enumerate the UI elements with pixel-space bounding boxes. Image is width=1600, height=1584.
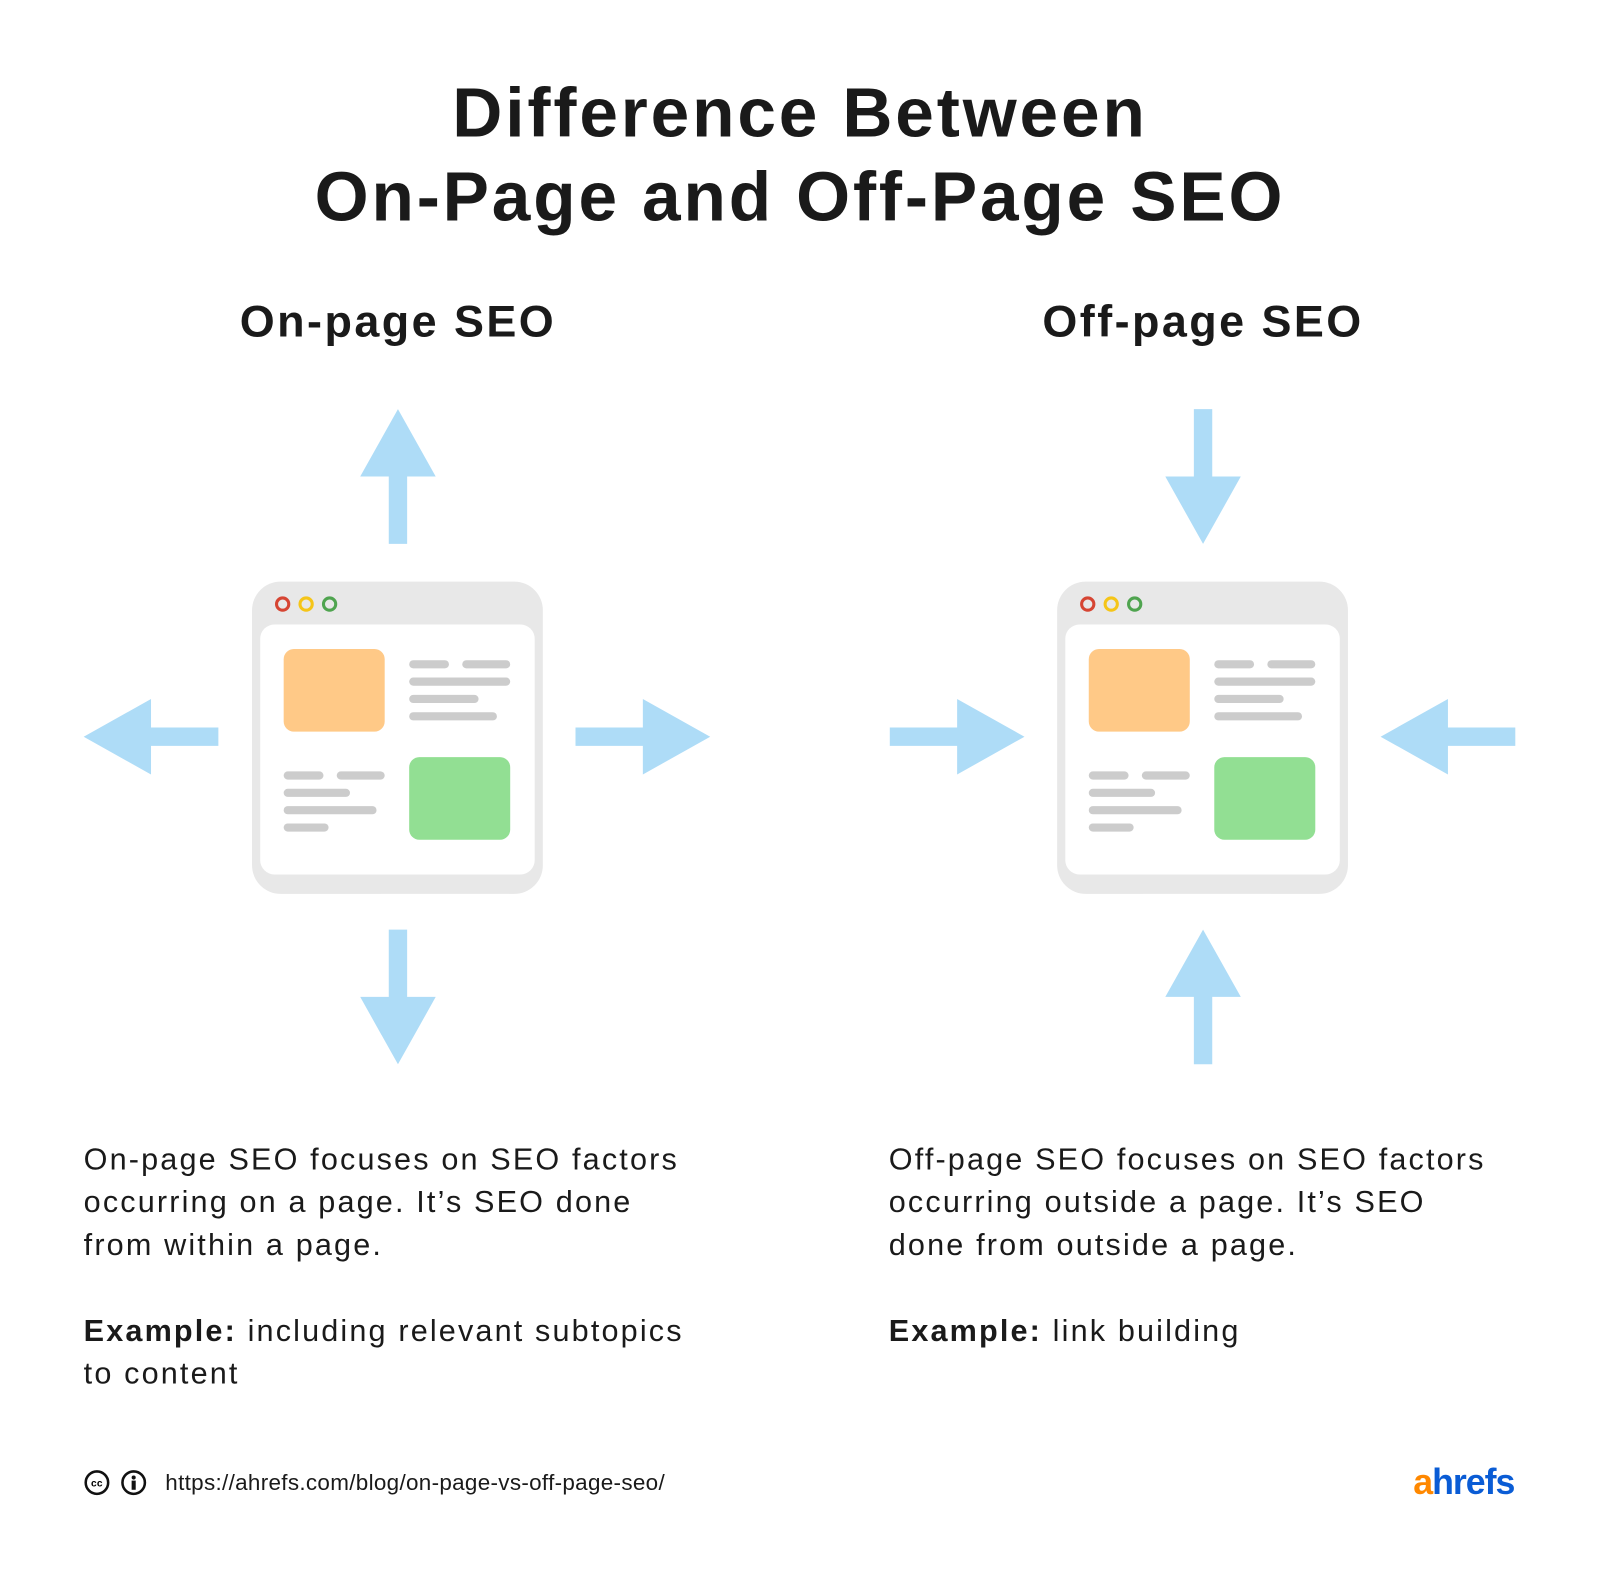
text: on-page description: from within a page. (84, 1229, 383, 1262)
off-page browser (1057, 582, 1348, 894)
text: on-page description: occurring on a page. It’s SEO done (84, 1186, 632, 1219)
text: off-page description (889, 1143, 1486, 1348)
arrow right in (890, 699, 1024, 774)
arrow down out (360, 930, 436, 1064)
arrow left in (1381, 699, 1515, 774)
title: Difference Between (452, 74, 1148, 152)
text: off-page description: Example: link building (889, 1314, 1241, 1348)
arrow left out (84, 699, 218, 774)
logo: ahrefs: ahrefs (1413, 1462, 1514, 1502)
heading: off-page: Off-page SEO (1042, 297, 1364, 347)
arrow up out (360, 409, 436, 544)
text: on-page description: On-page SEO focuses on SEO factors (84, 1143, 679, 1177)
text: off-page description: done from outside a page. (889, 1229, 1298, 1262)
text: on-page description (84, 1143, 684, 1391)
text: off-page description: occurring outside a page. It’s SEO (889, 1186, 1426, 1219)
arrow right out (576, 699, 710, 774)
text: off-page description: Off-page SEO focuses on SEO factors (889, 1143, 1486, 1177)
diagram (84, 409, 1516, 1064)
title (315, 74, 1285, 236)
text: on-page description: Example: including relevant subtopics (84, 1314, 684, 1348)
title: On-Page and Off-Page SEO (315, 158, 1285, 236)
footer: license icons and url: cc (91, 1479, 103, 1490)
arrow down in (1165, 409, 1241, 544)
on-page browser (252, 582, 543, 894)
footer: license icons and url: https://ahrefs.com/blog/on-page-vs-off-page-seo/ (165, 1469, 665, 1495)
heading: on-page: On-page SEO (240, 297, 556, 347)
arrow up in (1165, 930, 1241, 1064)
text: on-page description: to content (84, 1357, 240, 1391)
